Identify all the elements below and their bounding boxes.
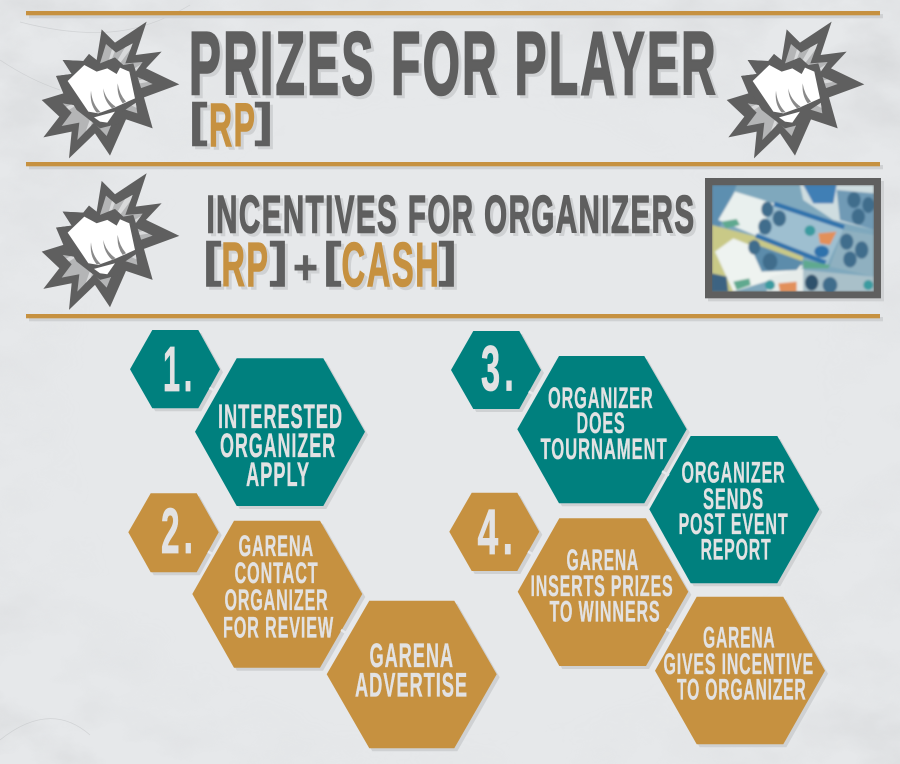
hexagon: garena inserts prizes: INSERTS PRIZES [530,570,674,603]
subtitle: RP [190,91,272,159]
hexagon: garena contact organizer: FOR REVIEW [223,612,334,644]
hexagon: garena inserts prizes: TO WINNERS [550,596,660,628]
hexagon: interested organizer apply [195,358,365,506]
hexagon: garena inserts prizes: GARENA [566,544,639,577]
hexagon: garena advertise: ADVERTISE [355,666,468,704]
panel: step 1 [130,330,365,506]
hexagon: number 1: 1. [163,333,196,405]
hexagon: interested organizer apply: ORGANIZER [220,427,336,465]
icon: fist burst top right [727,22,864,158]
subheading: RP plus cash: [ [324,233,341,286]
hexagon: garena gives incentive [655,597,825,744]
hexagon: organizer sends report: SENDS [703,483,764,516]
divider: top rule [26,11,880,15]
panel: step 4 [449,493,825,744]
hexagon: organizer sends report [649,436,819,583]
hexagon: number 1 [130,330,220,408]
hexagon: garena contact organizer: CONTACT [234,557,318,590]
hexagon: garena contact organizer [192,521,362,668]
hexagon: organizer does tournament: TOURNAMENT [540,433,668,466]
hexagon: organizer does tournament [517,356,687,503]
hexagon: number 2 [128,493,219,572]
hexagon: garena contact organizer: ORGANIZER [224,584,328,617]
hexagon: garena gives incentive: GARENA [703,622,776,654]
hexagon: number 3: 3. [481,332,518,404]
hexagon: number 4: 4. [478,496,518,568]
hexagon: number 2: 2. [161,495,197,567]
subheading: RP plus cash: CASH [342,231,440,300]
hexagon: garena advertise: GARENA [370,637,454,675]
subheading: RP plus cash: ] [270,233,287,286]
hexagon: interested organizer apply: INTERESTED [218,398,343,436]
icon: fist burst top left [42,22,179,158]
hexagon: garena advertise [327,601,497,748]
hexagon: number 4 [449,493,539,571]
hexagon: number 3 [451,331,541,409]
subtitle: RP: RP [209,91,256,159]
panel: step 3 [451,331,819,583]
subtitle: RP: ] [255,94,272,146]
panel: step 2 [128,493,497,748]
hexagon: organizer sends report: ORGANIZER [682,456,786,490]
subheading: RP plus cash: [ [204,233,221,286]
hexagon: interested organizer apply: APPLY [246,456,310,494]
subheading: RP plus cash: + [293,242,318,295]
hexagon: organizer does tournament: DOES [576,407,626,440]
divider: lower rule [26,314,880,318]
hexagon: organizer sends report: POST EVENT [678,508,788,541]
subtitle: RP: [ [190,94,207,146]
photo: peso banknotes [705,178,884,301]
divider: middle rule [26,162,880,166]
subheading: RP plus cash [204,231,456,300]
hexagon: organizer sends report: REPORT [700,534,772,566]
hexagon: organizer does tournament: ORGANIZER [548,382,654,415]
icon: fist burst incentives [42,173,179,310]
hexagon: garena contact organizer: GARENA [238,530,314,563]
subheading: RP plus cash: ] [439,233,456,286]
subheading: RP plus cash: RP [222,231,270,300]
hexagon: garena inserts prizes [518,518,688,666]
